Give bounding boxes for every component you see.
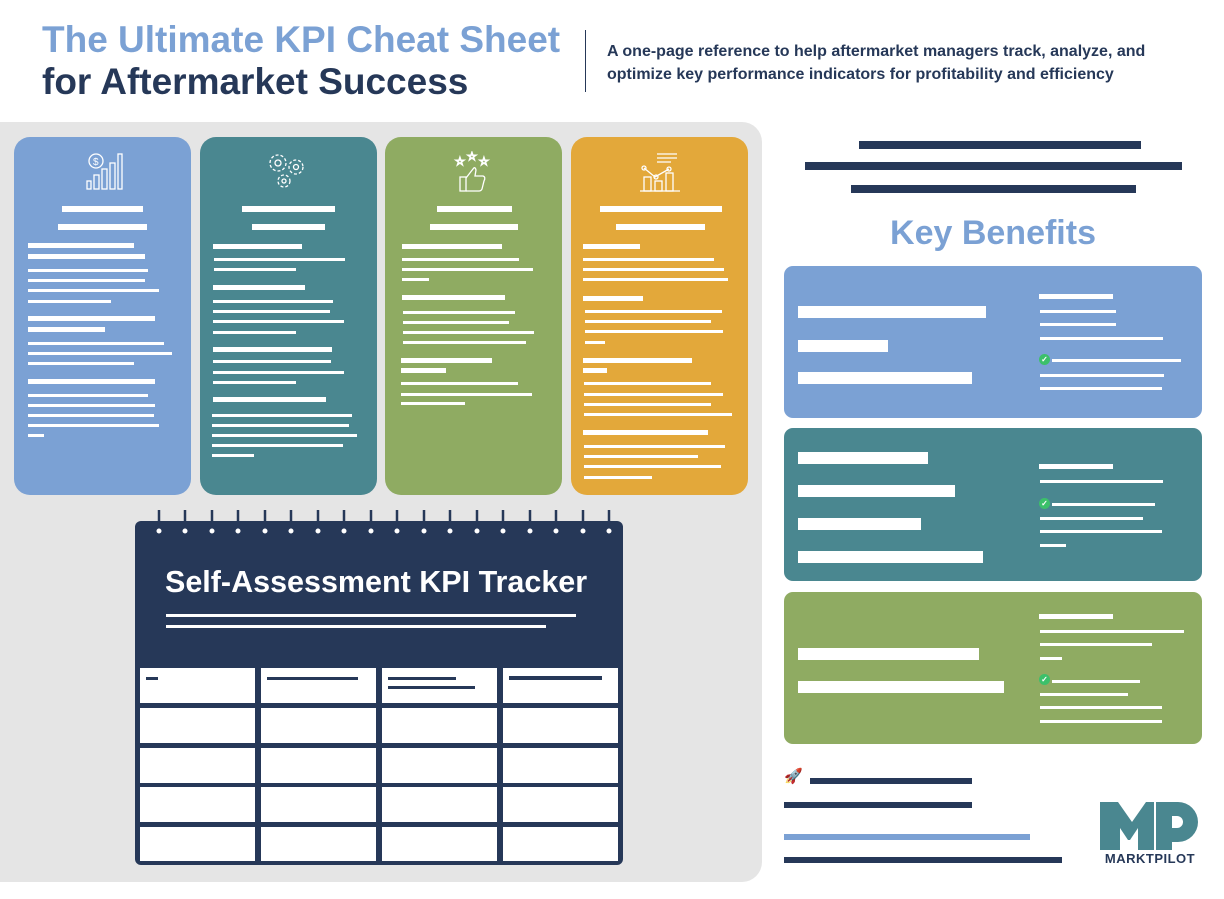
tracker heading: Self-Assessment KPI Tracker xyxy=(165,565,587,599)
title: for Aftermarket Success xyxy=(42,61,468,102)
text blocks: card bars xyxy=(28,206,732,479)
icon: gears xyxy=(269,154,304,188)
panel: benefit 1 xyxy=(784,266,1202,418)
icon: thumbs up stars xyxy=(454,151,490,192)
panel: benefit 3 xyxy=(784,592,1202,744)
divider xyxy=(585,30,586,92)
text block: right header bars xyxy=(805,141,1182,193)
title xyxy=(42,19,560,102)
subtitle: optimize key performance indicators for profitability and efficiency xyxy=(607,66,1114,83)
panel: gray background xyxy=(0,122,762,882)
icon: thumbs up stars: ☆ xyxy=(479,155,489,168)
logo: marktpilot xyxy=(1100,802,1198,866)
icon: thumbs up stars: ☆ xyxy=(455,155,465,168)
panel: self-assessment tracker xyxy=(135,510,623,865)
icon: check: ✓ xyxy=(1041,675,1048,684)
panel: benefit 2 xyxy=(784,428,1202,581)
panel: card 3 xyxy=(385,137,562,495)
logo: marktpilot: MARKTPILOT xyxy=(1105,851,1195,866)
icon: check: ✓ xyxy=(1041,355,1048,364)
icon: check xyxy=(1039,674,1050,685)
icon: check xyxy=(1039,354,1050,365)
panel: card 2 xyxy=(200,137,377,495)
icon: check: ✓ xyxy=(1041,499,1048,508)
panel: card 4 xyxy=(571,137,748,495)
icon: money chart xyxy=(86,153,123,190)
subtitle: A one-page reference to help aftermarket managers track, analyze, and xyxy=(607,43,1145,60)
subtitle xyxy=(607,43,1145,83)
title: The Ultimate KPI Cheat Sheet xyxy=(42,19,560,60)
spiral rings xyxy=(158,510,610,521)
icon: money chart: $ xyxy=(93,157,99,168)
panel: card 1 xyxy=(14,137,191,495)
heading: key benefits: Key Benefits xyxy=(890,214,1096,252)
icon: rocket: 🚀 xyxy=(784,768,803,785)
table grid xyxy=(140,668,618,861)
icon: analytics chart xyxy=(640,153,680,192)
icon: check xyxy=(1039,498,1050,509)
text block: bottom notes xyxy=(784,768,1062,863)
